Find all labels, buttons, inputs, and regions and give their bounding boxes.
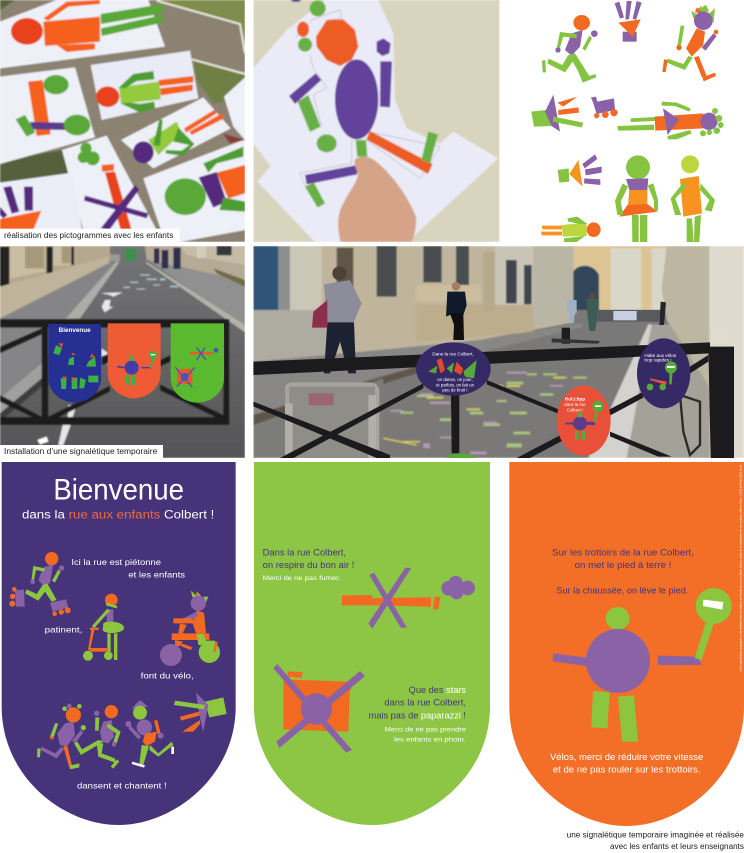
icon: crossed-out camera (273, 664, 365, 753)
pictogram: flying child (174, 693, 227, 732)
text: intro line 2: et les enfants (128, 569, 186, 579)
text: font du vélo: font du vélo, (141, 670, 194, 680)
text: paparazzi (369, 685, 467, 744)
pictogram: scooter rider (83, 594, 124, 661)
oval sign: red: dans la rue (564, 402, 586, 407)
text: patinent: patinent, (45, 624, 82, 634)
text: sidewalks rule: on met le pied à terre ! (575, 560, 671, 570)
text: paparazzi: Merci de ne pas prendre (385, 727, 466, 734)
text: sidewalks rule (552, 547, 694, 596)
mini banner: red (108, 323, 161, 398)
pictogram: roller skater (9, 552, 71, 616)
text: bicycles notice (550, 752, 703, 775)
oval sign: dark purple left: peu de bruit ! (442, 388, 468, 393)
pictogram: small speaker hand (558, 154, 602, 187)
oval sign: dark purple right: Halte aux vélos (644, 353, 677, 358)
text: dansent et chantent: dansent et chantent ! (77, 781, 167, 791)
oval sign: red: Rul;i;lipp (565, 397, 585, 402)
oval sign: dark purple left: et parfois, on fait un (436, 382, 475, 387)
caption: réalisation des pictogrammes: réalisation des pictogrammes avec les enfants (4, 230, 173, 240)
photo: banners on the barrier in the street (0, 246, 245, 458)
heading: Bienvenue: Bienvenue (53, 474, 184, 507)
text: paparazzi: dans la rue Colbert, (384, 698, 466, 708)
mini banner: blue: Bienvenue (59, 327, 91, 334)
caption: temporary signage made with children (567, 831, 744, 851)
mini banner: blue (48, 324, 101, 403)
mini banner: green (171, 323, 224, 403)
text: sidewalks rule: Sur les trottoirs de la rue Colbert, (552, 547, 694, 557)
pictogram: girl with green head (615, 155, 658, 242)
pictogram: dancer two (74, 705, 121, 769)
oval sign: dark purple right: trop rapides ! (644, 358, 672, 363)
metal cart (285, 382, 379, 458)
caption: temporary signage made with children: avec les enfants et leurs enseignants (610, 842, 744, 851)
banner: purple welcome (2, 462, 236, 825)
text: bon air: Dans la rue Colbert, (263, 547, 346, 557)
banner: green air and photos (254, 462, 490, 825)
oval sign: dark purple right (637, 338, 690, 408)
pictogram: tricycle child (160, 591, 220, 666)
pictogram: crowned runner (662, 5, 718, 81)
photo: children making pictograms (0, 0, 245, 242)
caption: installation d'une signalétique temporaire: Installation d’une signalétique temporaire (4, 446, 158, 456)
text: credit line vertical: Cette signalétique temporaire a été réalisée avec les enfants de l’école de la rue Colbert dans le cadre de la démarche rue aux enfants, Ville de Paris, CAUE de Paris 2022 et alii (739, 464, 742, 672)
barrier (253, 342, 734, 458)
pictogram: figure holding no-entry sign (553, 588, 732, 742)
pedestrian with red bag (312, 266, 362, 373)
text: bicycles notice: Vélos, merci de réduire votre vitesse (550, 752, 703, 762)
pictogram: runner (542, 15, 598, 83)
icon: crossed-out cigarette (342, 568, 475, 629)
text: paparazzi: Que des stars (409, 685, 467, 695)
photo: street with oval signs on the barrier (253, 246, 744, 458)
text: bicycles notice: et de ne pas rouler sur les trottoirs. (553, 765, 700, 775)
oval sign: red (557, 386, 611, 456)
caption: temporary signage made with children: une signalétique temporaire imaginée et réalisée (567, 831, 744, 840)
text: sidewalks rule: Sur la chaussée, on lève le pied. (556, 586, 688, 596)
text: paparazzi: mais pas de paparazzi ! (369, 710, 466, 720)
text: bon air (263, 547, 354, 582)
pictogram: dancer three (125, 700, 174, 768)
pedestrian in black (446, 282, 467, 340)
oval sign: red: Colbert ! (567, 407, 583, 412)
pictogram: small train (591, 97, 618, 118)
text: paparazzi: les enfants en photo. (394, 737, 466, 744)
distant pedestrians (567, 293, 666, 331)
photo: child's hand assembling a pictogram (253, 0, 500, 242)
oval sign: dark purple left: Dans la rue Colbert, (432, 351, 474, 356)
pictogram: dancer one (37, 704, 86, 769)
banner: orange sidewalks (509, 462, 744, 851)
pictogram: hand and triangle (615, 1, 642, 42)
oval sign: dark purple left (416, 342, 491, 396)
subheading: dans la rue aux enfants Colbert: dans la rue aux enfants Colbert ! (22, 509, 214, 522)
text: bon air: Merci de ne pas fumer. (263, 575, 341, 582)
text: intro line 1: Ici la rue est piétonne (71, 557, 161, 567)
pictogram: small lying child (541, 217, 601, 242)
oval sign: dark purple left: on danse, on joue, (437, 377, 473, 382)
pictogram: rocket-like child (531, 95, 583, 132)
panel: pictogram collection (500, 0, 744, 245)
pictogram: boy with lime head (671, 155, 715, 242)
pictogram: lying child (617, 102, 724, 139)
text: bon air: on respire du bon air ! (263, 560, 354, 570)
